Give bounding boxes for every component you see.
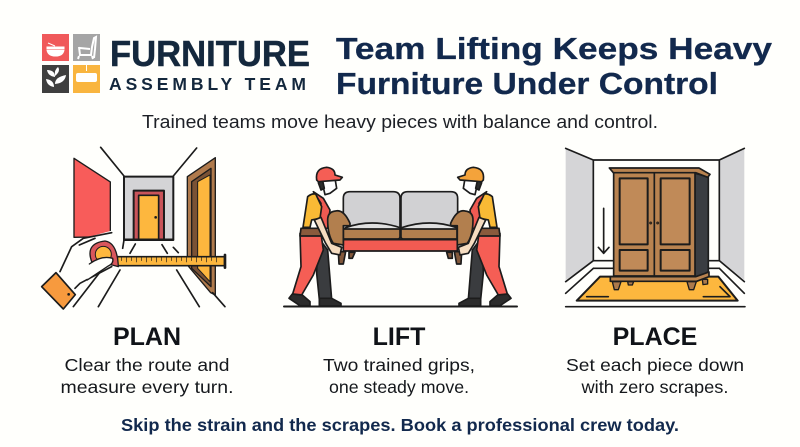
logo tile: lamp: [73, 65, 100, 93]
hand: [60, 231, 117, 288]
column: plan: [60, 323, 233, 397]
title: [336, 32, 772, 101]
place heading: PLACE: [613, 323, 697, 351]
arrow: [598, 208, 609, 253]
left mover arm: [314, 217, 342, 255]
panel: plan illustration: [42, 147, 225, 309]
lift heading: LIFT: [373, 323, 425, 351]
right open door: [187, 158, 225, 307]
perspective lines: [73, 147, 199, 307]
wardrobe: [609, 168, 710, 290]
call to action: Skip the strain and the scrapes. Book a professional crew today.: [121, 415, 679, 435]
title: Team Lifting Keeps Heavy: [336, 32, 772, 66]
right mover arm: [458, 217, 486, 255]
fingers: [87, 257, 113, 280]
floor line: [284, 306, 517, 308]
tape case: [90, 241, 118, 267]
column: plan: measure every turn.: [60, 377, 233, 397]
room outlines: [566, 148, 745, 307]
right wall: [720, 148, 744, 280]
panel: lift illustration: [284, 167, 517, 306]
logo tile: bowl: [42, 34, 69, 61]
left mover: [289, 167, 342, 306]
hallway end wall: [124, 177, 173, 240]
panel: place illustration: [566, 148, 745, 307]
left red wall: [74, 158, 110, 237]
column: lift: [323, 323, 475, 397]
column: place: with zero scrapes.: [580, 377, 728, 397]
logo: [42, 33, 310, 94]
tape blade: [117, 255, 225, 268]
far door: [134, 191, 164, 240]
title: Furniture Under Control: [336, 67, 718, 101]
column: lift: one steady move.: [329, 377, 469, 397]
right mover: [458, 167, 511, 306]
logo wordmark: FURNITURE: [110, 33, 310, 74]
column: place: [566, 323, 744, 397]
lift text: Two trained grips,: [323, 355, 475, 375]
rug: [577, 277, 738, 301]
sofa: [328, 192, 473, 264]
logo tile: leaves: [42, 65, 69, 93]
wardrobe side: [695, 173, 708, 280]
left wall: [566, 148, 593, 280]
sleeve: [42, 273, 75, 309]
place text: Set each piece down: [566, 355, 744, 375]
subtitle: Trained teams move heavy pieces with balance and control.: [142, 111, 658, 132]
logo tile: chair: [73, 34, 100, 61]
plan heading: PLAN: [113, 323, 181, 351]
logo tagline: ASSEMBLY TEAM: [109, 74, 306, 94]
plan text: Clear the route and: [64, 355, 230, 375]
